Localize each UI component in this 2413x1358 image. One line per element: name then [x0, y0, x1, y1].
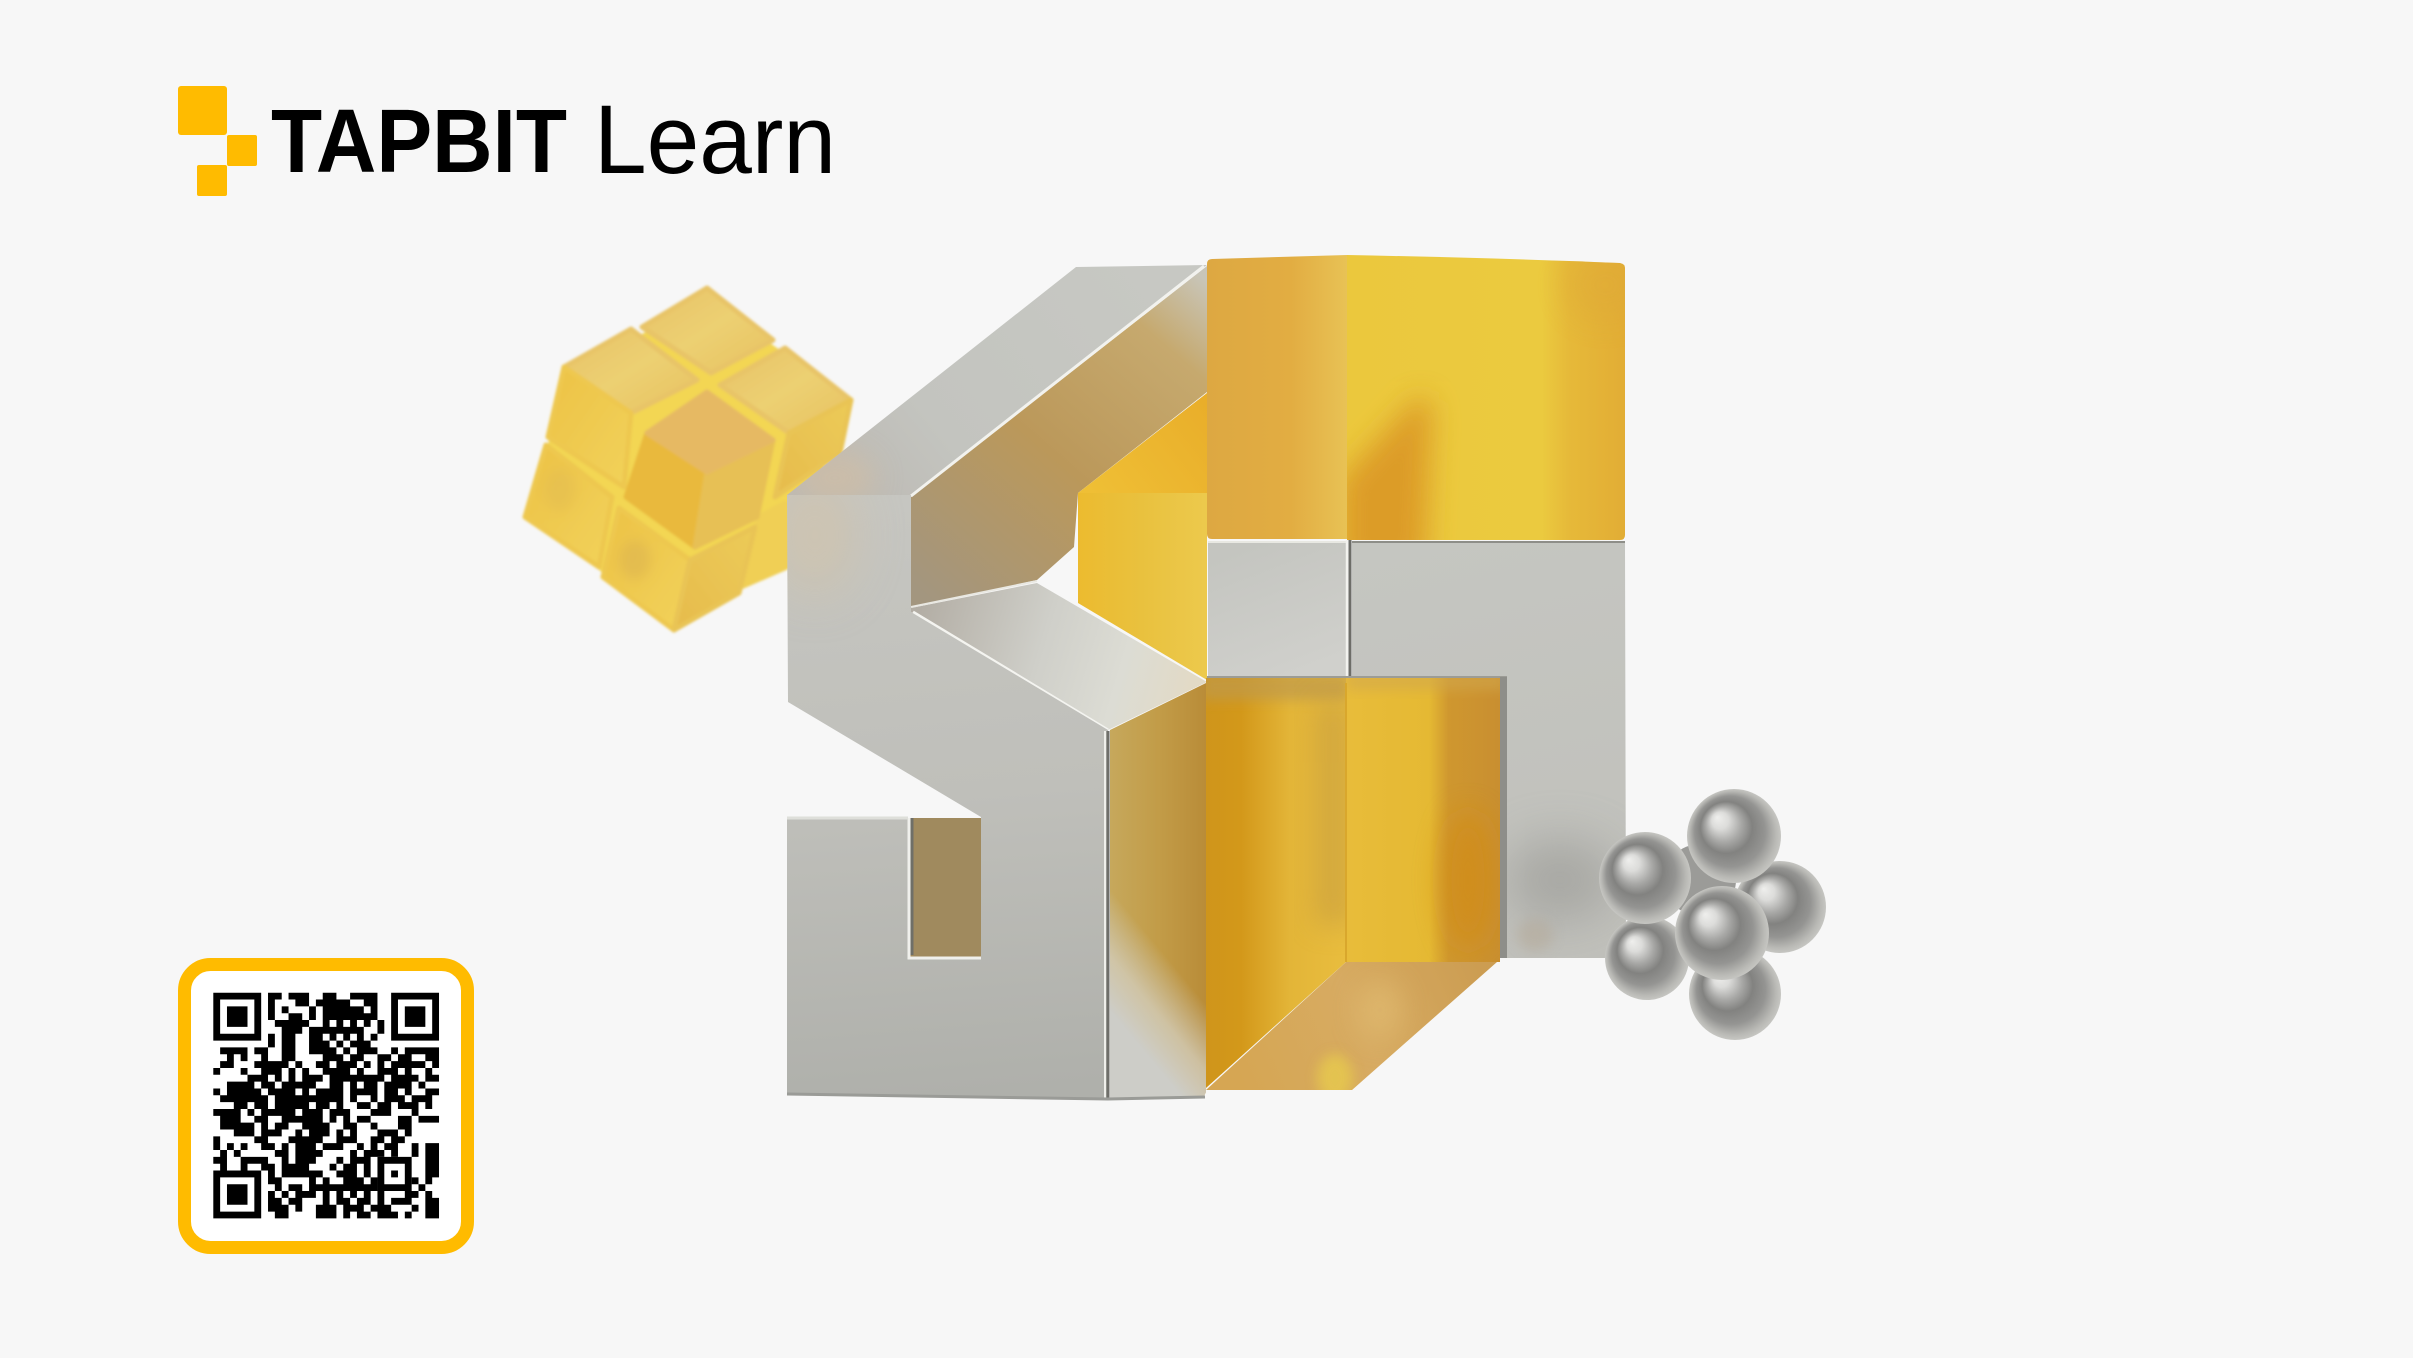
icon: yellow translucent cube cluster — [525, 288, 851, 630]
right cube — [720, 348, 851, 497]
main 3D letter S and dollar block — [775, 249, 1645, 1102]
sphere: center — [1675, 886, 1769, 980]
silver right L block — [1352, 542, 1626, 958]
S arm highlight edge — [911, 266, 1204, 496]
silver ledge top face — [911, 583, 1207, 730]
lower front cube — [603, 508, 755, 630]
silver middle block — [1208, 542, 1347, 678]
left cube — [548, 329, 697, 487]
yellow lower block: right face — [1346, 678, 1500, 962]
QR modules — [213, 993, 439, 1218]
sphere: right — [1734, 861, 1826, 953]
S inner reflective face — [911, 266, 1207, 608]
lower-left cube — [525, 445, 612, 567]
wordmark text: Learn — [594, 85, 836, 194]
lower-right cube sliver — [741, 503, 787, 587]
S corner side face — [1110, 683, 1206, 1098]
warm reflection on S — [788, 495, 852, 584]
icon: silver sphere cluster — [1599, 789, 1826, 1040]
yellow block behind S: front face — [1078, 493, 1207, 680]
wordmark text — [271, 85, 836, 194]
center tall cube — [626, 392, 773, 547]
yellow upper block: left panel — [1207, 255, 1347, 539]
S notch — [910, 818, 981, 957]
S main front face — [787, 495, 1108, 1098]
back cube — [642, 288, 773, 373]
QR frame — [184, 964, 468, 1248]
warm reflection on arm — [805, 456, 866, 495]
logo: TAPBIT Learn — [178, 85, 836, 196]
yellow block behind S: top face — [1078, 393, 1207, 493]
orange shadow in upper block — [1347, 393, 1442, 540]
sphere: bottom — [1689, 948, 1781, 1040]
bright inner glow between cubes — [530, 300, 845, 625]
wordmark text: TAPBIT — [271, 92, 567, 192]
yellow lower block: bottom face — [1206, 962, 1497, 1090]
silver S: upper arm top face — [787, 265, 1207, 495]
QR code card — [184, 964, 468, 1248]
sphere: rear core — [1664, 844, 1736, 916]
icon: logo squares — [178, 86, 257, 196]
sphere: left — [1599, 832, 1691, 924]
yellow upper block: right panel — [1347, 250, 1627, 542]
sphere: lower left — [1605, 916, 1689, 1000]
yellow lower block: left face — [1206, 678, 1346, 1088]
sphere: top — [1687, 789, 1781, 883]
